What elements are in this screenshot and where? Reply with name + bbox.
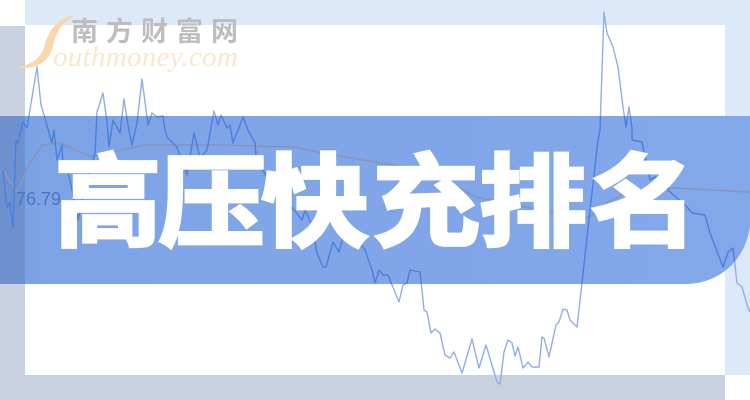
chart lines showing through the banner <box>2 116 750 284</box>
logo text: 南方财富网: 南方财富网 <box>71 16 246 47</box>
logo text: southmoney.com: outhmoney.com <box>53 41 238 73</box>
title banner <box>0 116 750 284</box>
icon: orange S swoosh <box>17 15 76 68</box>
logo watermark <box>17 15 246 73</box>
title: 高压快充排名: 高压快充排名 <box>54 147 698 261</box>
axis value label: 76.79 <box>16 189 61 209</box>
